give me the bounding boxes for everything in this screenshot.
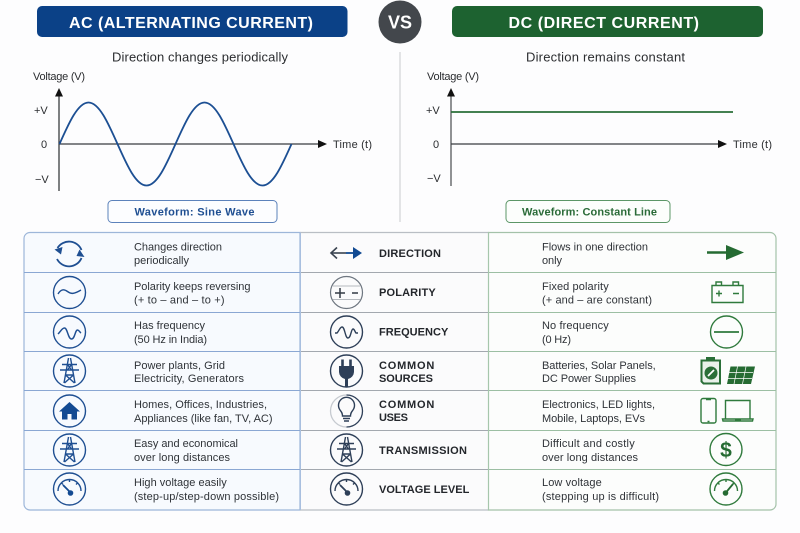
text: DC frequency: No frequency	[542, 320, 609, 332]
label: voltage level: VOLTAGE LEVEL	[379, 484, 470, 496]
chart: AC sine waveform: +V	[34, 105, 48, 117]
text: AC uses	[134, 399, 272, 425]
text: DC frequency: (0 Hz)	[542, 334, 571, 346]
label: transmission: TRANSMISSION	[379, 445, 467, 457]
text: DC uses: Electronics, LED lights,	[542, 399, 655, 411]
label: direction: DIRECTION	[379, 248, 441, 260]
text: DC uses: Mobile, Laptops, EVs	[542, 413, 646, 425]
text: AC polarity: Polarity keeps reversing	[134, 281, 250, 293]
text: DC polarity: (+ and – are constant)	[542, 294, 652, 306]
text: AC polarity: (+ to – and – to +)	[134, 294, 224, 306]
label: waveform sine wave: Waveform: Sine Wave	[134, 206, 254, 218]
icon: battery and solar panel	[702, 357, 755, 384]
text: DC polarity	[542, 281, 652, 306]
icon: home	[54, 395, 86, 427]
text: AC sources	[134, 360, 244, 385]
label: common sources: COMMON	[379, 360, 434, 372]
text: DC direction	[542, 242, 648, 267]
icon: arrows both directions	[331, 247, 362, 259]
label: common uses	[379, 399, 434, 424]
text: AC voltage	[134, 477, 279, 503]
chart: DC constant waveform: 0	[433, 139, 439, 151]
icon: DC battery	[712, 282, 743, 302]
header: AC: AC (ALTERNATING CURRENT)	[69, 15, 313, 32]
text: DC frequency	[542, 320, 609, 346]
icon: transmission tower	[330, 434, 362, 466]
text: AC transmission: Easy and economical	[134, 438, 238, 450]
text: DC transmission	[542, 438, 638, 464]
label: common sources: SOURCES	[379, 373, 433, 385]
text: DC sources	[542, 360, 656, 385]
text: AC sources: Power plants, Grid	[134, 360, 225, 372]
text: AC frequency: (50 Hz in India)	[134, 334, 207, 346]
chart: DC constant waveform: −V	[427, 173, 441, 185]
icon: light bulb	[330, 395, 362, 427]
badge: VS	[378, 0, 422, 44]
label: waveform constant line: Waveform: Constant Line	[522, 206, 657, 218]
header: DC: DC (DIRECT CURRENT)	[508, 15, 699, 32]
text: AC sources: Electricity, Generators	[134, 373, 244, 385]
icon: dollar: $	[720, 439, 732, 462]
text: AC transmission	[134, 438, 238, 464]
comparison table	[24, 232, 776, 510]
text: DC direction: only	[542, 255, 562, 267]
text: DC transmission: Difficult and costly	[542, 438, 635, 450]
text: AC frequency: Has frequency	[134, 320, 206, 332]
label: waveform sine wave	[108, 200, 277, 222]
text: DC uses	[542, 399, 655, 425]
chart: DC constant waveform: Voltage (V)	[427, 71, 479, 83]
chart: AC sine waveform: −V	[35, 174, 49, 186]
label: frequency: FREQUENCY	[379, 326, 449, 338]
label: waveform constant line	[506, 200, 670, 222]
text: AC direction: Changes direction	[134, 242, 222, 254]
text: DC sources: DC Power Supplies	[542, 373, 636, 385]
text: DC transmission: over long distances	[542, 452, 638, 464]
label: polarity: POLARITY	[379, 287, 436, 299]
text: AC voltage: High voltage easily	[134, 477, 227, 489]
chart: DC constant waveform: +V	[426, 105, 440, 117]
text: DC voltage: (stepping up is difficult)	[542, 491, 659, 503]
chart: DC constant waveform	[426, 71, 772, 186]
icon: AC frequency wave	[54, 316, 86, 348]
icon: AC transmission tower	[54, 355, 86, 387]
label: common uses: USES	[379, 412, 408, 424]
label: common uses: COMMON	[379, 399, 434, 411]
text: DC voltage	[542, 477, 659, 503]
text: DC sources: Batteries, Solar Panels,	[542, 360, 656, 372]
text: AC uses: Homes, Offices, Industries,	[134, 399, 267, 411]
text: DC voltage: Low voltage	[542, 477, 602, 489]
icon: plug	[330, 355, 362, 387]
icon: polarity plus minus	[330, 276, 362, 308]
icon: phone and laptop	[701, 398, 753, 423]
chart: AC sine waveform	[33, 71, 372, 191]
icon: cycle arrows	[54, 242, 84, 266]
icon: AC gauge	[54, 473, 86, 505]
chart: DC constant waveform: Time (t)	[733, 139, 772, 151]
icon: gauge	[330, 473, 362, 505]
icon: AC polarity wave	[54, 276, 86, 308]
subtitle: DC: Direction remains constant	[526, 50, 685, 64]
text: AC uses: Appliances (like fan, TV, AC)	[134, 413, 272, 425]
subtitle: AC: Direction changes periodically	[112, 50, 288, 64]
icon: AC transmission tower economical	[54, 434, 86, 466]
text: AC transmission: over long distances	[134, 452, 230, 464]
text: AC direction	[134, 242, 222, 267]
icon: frequency wave	[330, 316, 362, 348]
chart: AC sine waveform: Time (t)	[333, 139, 372, 151]
icon: dollar	[710, 434, 742, 466]
text: DC polarity: Fixed polarity	[542, 281, 609, 293]
text: AC direction: periodically	[134, 255, 190, 267]
header: AC	[37, 6, 348, 37]
badge: VS: VS	[388, 12, 412, 32]
chart: AC sine waveform: 0	[41, 139, 47, 151]
chart: AC sine waveform: Voltage (V)	[33, 71, 85, 83]
text: DC direction: Flows in one direction	[542, 242, 648, 254]
header: DC	[452, 6, 763, 37]
label: common sources	[379, 360, 434, 385]
icon: DC arrow right	[707, 245, 744, 260]
text: AC polarity	[134, 281, 250, 306]
text: AC frequency	[134, 320, 207, 346]
icon: DC gauge	[710, 473, 742, 505]
icon: no frequency	[710, 316, 742, 348]
text: AC voltage: (step-up/step-down possible)	[134, 491, 279, 503]
